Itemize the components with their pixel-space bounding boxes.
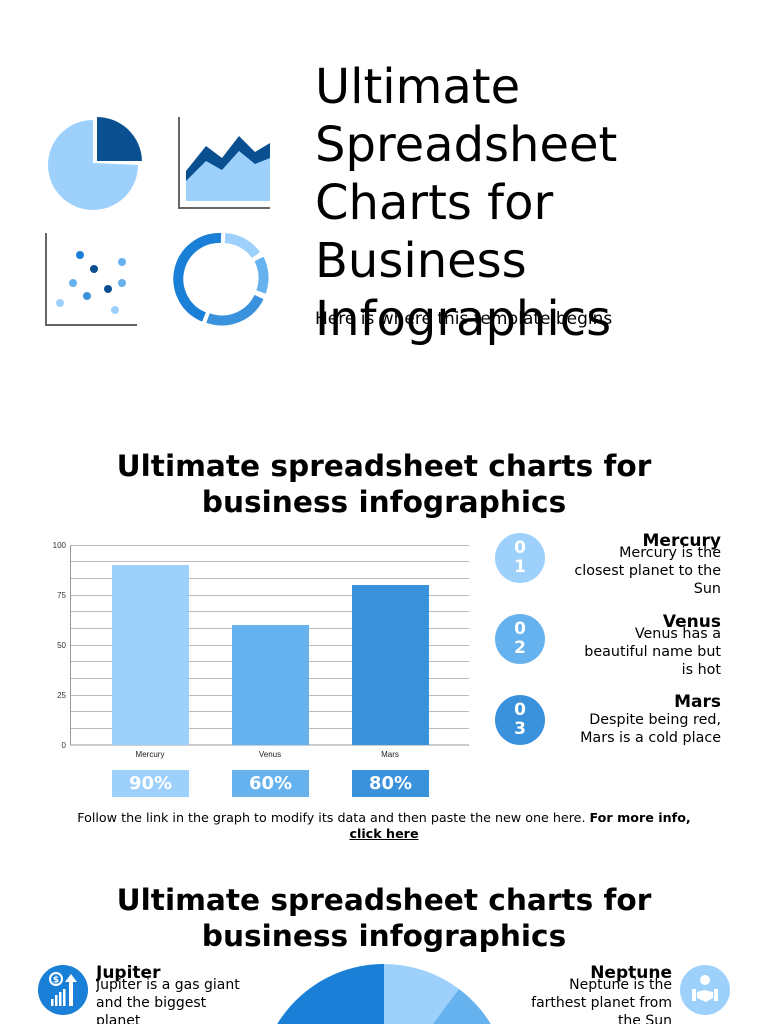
bar chart: 75 bbox=[57, 591, 67, 600]
number badge 03 bbox=[495, 695, 545, 745]
subtitle: Here is where this template begins bbox=[315, 309, 612, 329]
percent label: 80% bbox=[352, 770, 429, 797]
heading: section 1 bbox=[117, 449, 652, 519]
bar chart: 100 bbox=[53, 541, 67, 550]
text: Venus: Venus bbox=[663, 612, 721, 632]
number badge 02 bbox=[495, 614, 545, 664]
number badge 01 bbox=[495, 533, 545, 583]
icon group: chart icons bbox=[45, 117, 270, 326]
number badge 03: 0 bbox=[514, 700, 526, 720]
footnote: Follow the link in the graph to modify its data and then paste the new one here. For more info, bbox=[77, 810, 691, 825]
icon: Neptune handshake bbox=[680, 965, 730, 1015]
text: Mars: Mars bbox=[674, 692, 721, 712]
icon: Jupiter growth bbox=[38, 965, 88, 1015]
heading: section 2: business infographics bbox=[202, 919, 566, 953]
bar chart: Mars bbox=[381, 750, 399, 759]
icon: Jupiter growth: $ bbox=[53, 976, 59, 986]
heading: section 1: Ultimate spreadsheet charts for bbox=[117, 449, 651, 483]
heading: section 2: Ultimate spreadsheet charts for bbox=[117, 883, 651, 917]
icon: area chart bbox=[179, 117, 270, 208]
title: Ultimate bbox=[315, 59, 520, 115]
text: Mars bbox=[580, 692, 721, 746]
percent label: 80%: 80% bbox=[369, 773, 412, 794]
footnote: click here bbox=[349, 826, 419, 841]
title: Charts for bbox=[315, 175, 553, 231]
footnote bbox=[77, 810, 691, 841]
title: Spreadsheet bbox=[315, 117, 617, 173]
number badge 03: 3 bbox=[514, 719, 526, 739]
bar chart: 0 bbox=[62, 741, 67, 750]
percent label: 90%: 90% bbox=[129, 773, 172, 794]
bar: Mercury bbox=[112, 565, 189, 745]
bar chart bbox=[53, 541, 469, 759]
icon: pie chart bbox=[48, 117, 142, 210]
heading: section 1: business infographics bbox=[202, 485, 566, 519]
bar: Mars bbox=[352, 585, 429, 745]
bar: Venus bbox=[232, 625, 309, 745]
title: Business bbox=[315, 233, 527, 289]
title bbox=[315, 59, 617, 347]
heading: section 2 bbox=[117, 883, 652, 953]
pie chart bbox=[277, 964, 491, 1024]
bar chart: Venus bbox=[259, 750, 281, 759]
number badge 01: 0 bbox=[514, 538, 526, 558]
text: Mercury: Mercury is the closest planet to the Sun bbox=[574, 545, 721, 597]
bar chart: Mercury bbox=[136, 750, 164, 759]
number badge 01: 1 bbox=[514, 557, 526, 577]
icon: donut chart bbox=[178, 238, 264, 320]
percent label: 60%: 60% bbox=[249, 773, 292, 794]
percent label: 90% bbox=[112, 770, 189, 797]
bar chart: 25 bbox=[57, 691, 67, 700]
title: Infographics bbox=[315, 291, 611, 347]
icon: scatter chart bbox=[46, 233, 137, 325]
bar chart: 50 bbox=[57, 641, 67, 650]
text: Venus: Venus has a beautiful name but is hot bbox=[584, 626, 721, 678]
number badge 02: 2 bbox=[514, 638, 526, 658]
text: Mars: Despite being red, Mars is a cold place bbox=[580, 712, 721, 746]
text: Mercury: Mercury bbox=[643, 531, 721, 551]
number badge 02: 0 bbox=[514, 619, 526, 639]
percent label: 60% bbox=[232, 770, 309, 797]
